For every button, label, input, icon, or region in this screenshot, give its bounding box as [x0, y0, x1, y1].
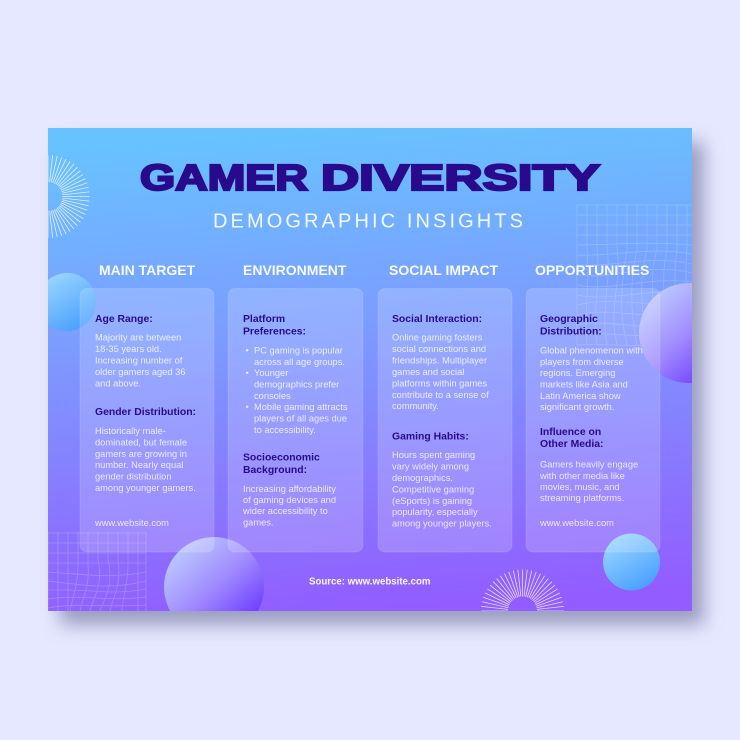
text: gaming habits: Competitive gaming	[392, 484, 474, 494]
panel: main target	[80, 262, 214, 552]
sphere: right	[639, 283, 692, 383]
text: gender distribution: gamers are growing in	[95, 449, 187, 459]
link: website: www.website.com	[94, 518, 169, 528]
text: gaming habits: Hours spent gaming	[392, 450, 475, 460]
text: social interaction: games and social	[392, 367, 464, 377]
list: platform preferences: •	[246, 346, 249, 356]
heading: main target: MAIN TARGET	[99, 262, 196, 278]
subheading: platform preferences: Preferences:	[243, 326, 306, 337]
text: geographic distribution: Latin America show	[540, 391, 621, 401]
title	[140, 157, 600, 198]
poster background	[48, 128, 692, 611]
card: social impact	[378, 288, 512, 552]
text: socioeconomic background: of gaming devices and	[243, 495, 336, 505]
subheading: social interaction: Social Interaction:	[392, 314, 482, 325]
subheading: age range: Age Range:	[95, 314, 153, 325]
text: gender distribution: number. Nearly equal	[95, 460, 183, 470]
list: platform preferences: demographics prefer	[254, 380, 339, 390]
text: social interaction: community.	[392, 401, 439, 411]
title: GAMER	[140, 157, 308, 198]
sunburst: top left	[48, 155, 90, 238]
text: socioeconomic background: wider accessibility to	[242, 506, 328, 516]
list: platform preferences: Mobile gaming attracts	[254, 402, 348, 412]
list: platform preferences: players of all ages due	[254, 414, 347, 424]
text: social interaction: friendships. Multiplayer	[392, 355, 487, 365]
subheading: gender distribution: Gender Distribution:	[95, 407, 196, 418]
list: platform preferences: PC gaming is popular	[254, 346, 343, 356]
panel: opportunities	[526, 262, 660, 552]
text: influence on other media: streaming platforms.	[540, 493, 624, 503]
panel: social impact	[378, 262, 512, 552]
text: geographic distribution: players from diverse	[540, 357, 624, 367]
panel: environment	[228, 262, 363, 552]
text: gaming habits: among younger players.	[392, 519, 492, 529]
text: gaming habits: demographics.	[392, 473, 453, 483]
text: age range: Majority are between	[95, 332, 181, 342]
subtitle: DEMOGRAPHIC INSIGHTS	[213, 210, 523, 232]
card: environment	[228, 288, 363, 552]
text: gender distribution: Historically male-	[95, 426, 166, 436]
subheading: geographic distribution: Distribution:	[540, 326, 602, 337]
heading: environment: ENVIRONMENT	[243, 262, 347, 278]
text: socioeconomic background: Increasing affordability	[243, 484, 336, 494]
text: socioeconomic background: games.	[243, 517, 274, 527]
text: social interaction: contribute to a sense of	[392, 390, 489, 400]
title: DIVERSITY	[321, 157, 600, 198]
text: age range: 18-35 years old.	[95, 344, 162, 354]
subheading: platform preferences: Platform	[243, 314, 285, 325]
card: opportunities	[526, 288, 660, 552]
text: geographic distribution: significant growth.	[540, 402, 614, 412]
grid: bottom left	[48, 532, 146, 611]
poster shadow	[60, 142, 704, 625]
sphere: bottom	[164, 537, 264, 611]
text: age range: older gamers aged 36	[95, 367, 185, 377]
list: platform preferences: Younger	[254, 368, 288, 378]
heading: social impact: SOCIAL IMPACT	[389, 262, 499, 278]
text: social interaction: Online gaming fosters	[392, 332, 483, 342]
text: social interaction: platforms within games	[392, 378, 487, 388]
text: geographic distribution: regions. Emerging	[540, 368, 615, 378]
text: gaming habits: popularity, especially	[392, 507, 478, 517]
subheading: socioeconomic background: Socioeconomic	[243, 453, 320, 464]
link: website: www.website.com	[539, 518, 614, 528]
text: age range: Increasing number of	[95, 356, 183, 366]
subheading: socioeconomic background: Background:	[243, 465, 307, 476]
text: social interaction: social connections and	[392, 344, 486, 354]
card: main target	[80, 288, 214, 552]
subheading: gaming habits: Gaming Habits:	[392, 432, 469, 443]
heading: opportunities: OPPORTUNITIES	[535, 262, 649, 278]
text: gaming habits: vary widely among	[392, 462, 469, 472]
subheading: influence on other media: Influence on	[540, 427, 601, 438]
list: platform preferences: across all age groups.	[254, 357, 345, 367]
subheading: geographic distribution: Geographic	[540, 314, 598, 325]
list: platform preferences: •	[246, 368, 249, 378]
list: platform preferences: •	[246, 402, 249, 412]
list: platform preferences: to accessibility.	[254, 425, 316, 435]
text: gender distribution: among younger gamers.	[95, 483, 196, 493]
text: geographic distribution: markets like Asia and	[540, 380, 628, 390]
text: gaming habits: (eSports) is gaining	[392, 496, 472, 506]
sunburst: bottom	[481, 570, 564, 611]
text: influence on other media: with other media like	[539, 471, 625, 481]
decorations	[48, 155, 692, 611]
sphere: top left	[48, 273, 96, 331]
text: influence on other media: Gamers heavily engage	[540, 460, 638, 470]
list: platform preferences: consoles	[254, 391, 291, 401]
text: gender distribution: gender distribution	[95, 472, 172, 482]
grid: top right	[577, 205, 692, 346]
subheading: influence on other media: Other Media:	[540, 439, 604, 450]
sphere: bottom right	[603, 534, 660, 590]
text: gender distribution: dominated, but female	[95, 437, 187, 447]
text: influence on other media: movies, music, and	[540, 482, 620, 492]
source line: Source: www.website.com	[309, 576, 430, 588]
text: age range: and above.	[95, 378, 141, 388]
text: geographic distribution: Global phenomenon with	[540, 346, 643, 356]
